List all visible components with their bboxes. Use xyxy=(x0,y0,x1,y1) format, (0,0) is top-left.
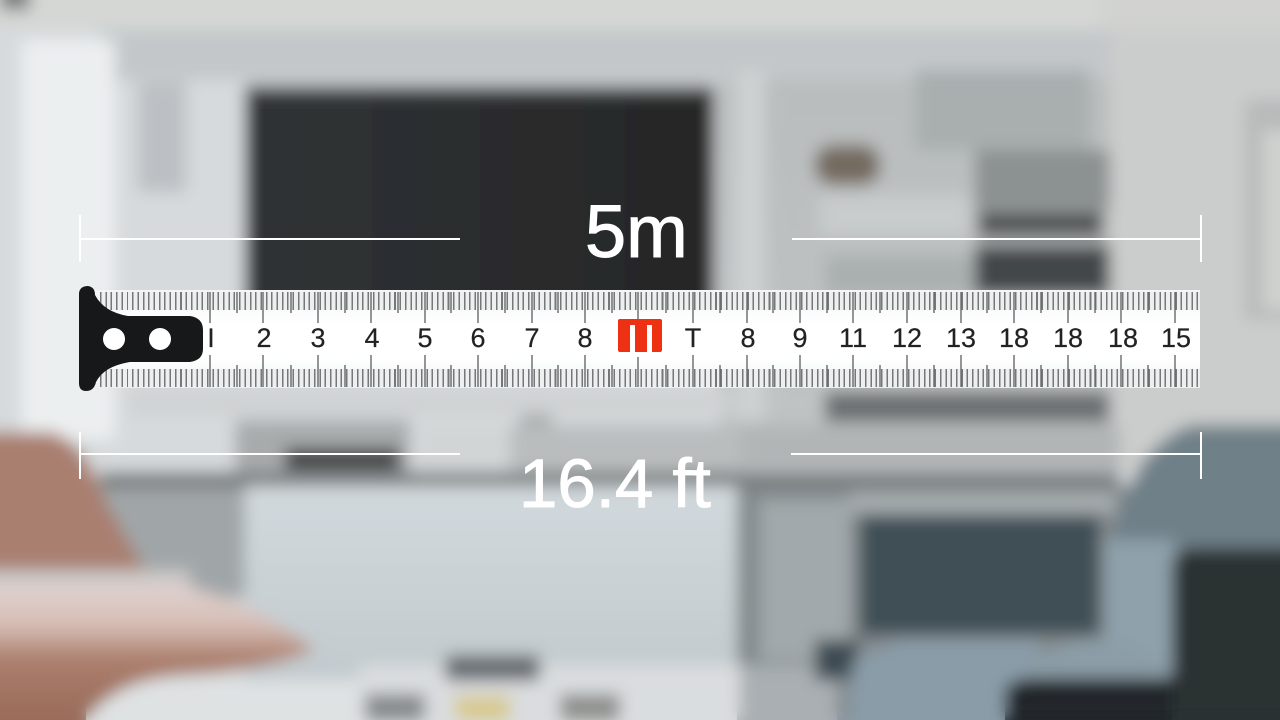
scale numbers: 3 xyxy=(310,323,326,353)
heading: 16.4 ft: 16.4 ft xyxy=(519,445,711,522)
scale numbers: 15 xyxy=(1161,323,1191,353)
tape measure xyxy=(79,286,1200,391)
scale numbers: 18 xyxy=(1053,323,1083,353)
scale numbers: 18 xyxy=(1108,323,1138,353)
scale numbers: 2 xyxy=(256,323,272,353)
red metre marker xyxy=(618,319,662,352)
minor ticks, top edge xyxy=(100,292,1200,310)
scale numbers: 18 xyxy=(999,323,1029,353)
scale numbers: I xyxy=(207,323,215,353)
scale numbers: 11 xyxy=(839,323,867,353)
scale numbers: 5 xyxy=(417,323,433,353)
top dimension line: 5m xyxy=(79,215,1202,262)
tape blade xyxy=(90,290,1200,388)
scale numbers: 7 xyxy=(524,323,540,353)
scale numbers: 8 xyxy=(740,323,756,353)
heading: 5m: 5m xyxy=(585,190,688,273)
scale numbers: 9 xyxy=(792,323,808,353)
scale numbers: 8 xyxy=(577,323,593,353)
major ticks xyxy=(209,292,1176,387)
minor ticks, bottom edge xyxy=(100,369,1200,387)
scale numbers: 13 xyxy=(946,323,976,353)
bottom dimension line: 16.4 ft xyxy=(79,432,1202,479)
scale numbers: 6 xyxy=(470,323,486,353)
end hook with two holes xyxy=(79,286,203,391)
scale numbers: 12 xyxy=(892,323,922,353)
scale numbers: 4 xyxy=(364,323,380,353)
scale numbers: T xyxy=(685,323,701,353)
scale numbers xyxy=(207,323,1191,353)
